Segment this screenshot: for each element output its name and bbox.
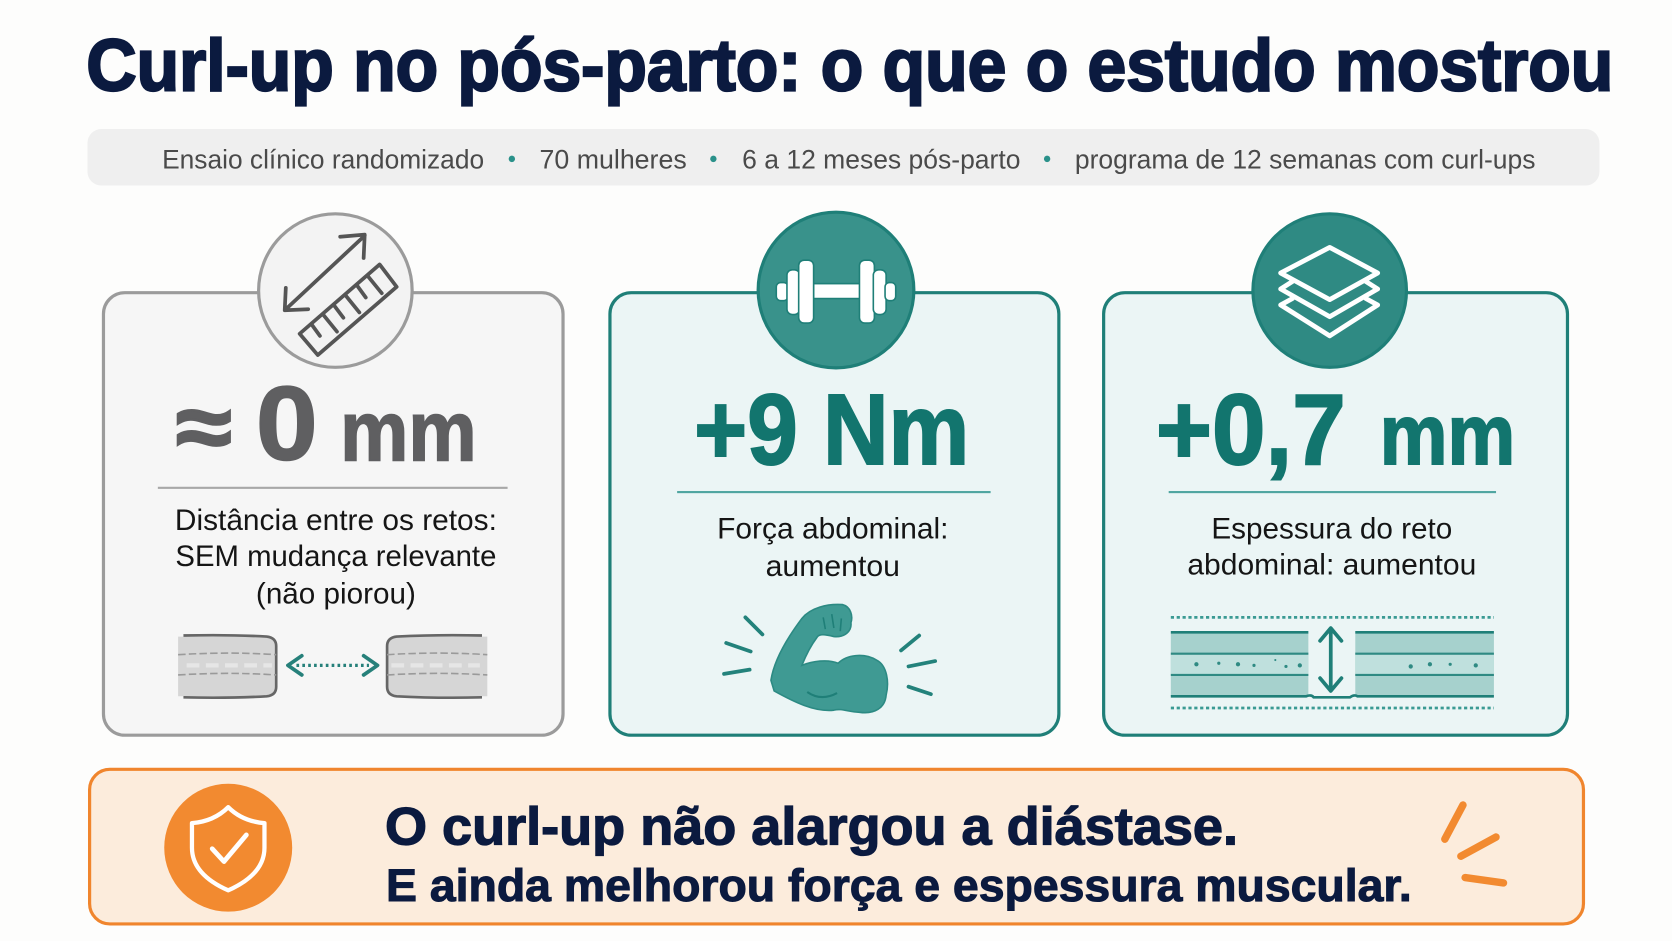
big number: plus 0.7 mm bbox=[1156, 374, 1515, 486]
description: strength: Força abdominal: bbox=[717, 512, 948, 545]
callout: conclusion bbox=[90, 769, 1583, 924]
description: strength: aumentou bbox=[766, 550, 900, 583]
description: distance bbox=[175, 504, 497, 611]
title: Curl-up no pós-parto: o que o estudo mostrou bbox=[86, 24, 1613, 107]
panel: muscle thickness bbox=[1104, 214, 1567, 735]
conclusion subline: E ainda melhorou força e espessura muscular. bbox=[386, 859, 1412, 911]
description: thickness: abdominal: aumentou bbox=[1187, 549, 1476, 582]
study details bar: programa de 12 semanas com curl-ups bbox=[1075, 144, 1535, 174]
study details bar bbox=[87, 129, 1599, 186]
description: strength bbox=[717, 512, 948, 583]
panel: distance between recti bbox=[103, 214, 563, 735]
study details bar: 6 a 12 meses pós-parto bbox=[742, 144, 1020, 174]
icon: ruler and arrow bbox=[259, 214, 412, 367]
illustration: thicker muscle layers bbox=[1171, 617, 1494, 708]
icon: flexed arm bbox=[724, 604, 935, 713]
description: distance: (não piorou) bbox=[256, 578, 416, 611]
big number: about zero mm: mm bbox=[340, 385, 477, 480]
big number: about zero mm bbox=[176, 366, 477, 483]
description: distance: SEM mudança relevante bbox=[175, 540, 496, 573]
icon: stacked layers bbox=[1253, 214, 1406, 367]
big number: plus nine Nm: +9 Nm bbox=[694, 374, 969, 486]
icon: emphasis sparks bbox=[1445, 805, 1503, 883]
big number: plus 0.7 mm: mm bbox=[1380, 388, 1515, 483]
conclusion headline: O curl-up não alargou a diástase. bbox=[385, 798, 1238, 857]
big number: plus 0.7 mm: +0,7 bbox=[1156, 374, 1346, 486]
description: distance: Distância entre os retos: bbox=[175, 504, 497, 537]
description: thickness: Espessura do reto bbox=[1211, 512, 1452, 545]
icon: dumbbell bbox=[758, 212, 914, 368]
icon: shield with check bbox=[164, 784, 292, 912]
description: thickness bbox=[1187, 512, 1476, 582]
study details bar: 70 mulheres bbox=[540, 144, 687, 174]
big number: about zero mm: ≈ bbox=[176, 376, 231, 476]
illustration: separated muscle bands bbox=[178, 635, 487, 698]
panel: abdominal strength bbox=[610, 212, 1059, 735]
big number: about zero mm: 0 bbox=[256, 366, 318, 483]
study details bar: Ensaio clínico randomizado bbox=[162, 144, 484, 174]
